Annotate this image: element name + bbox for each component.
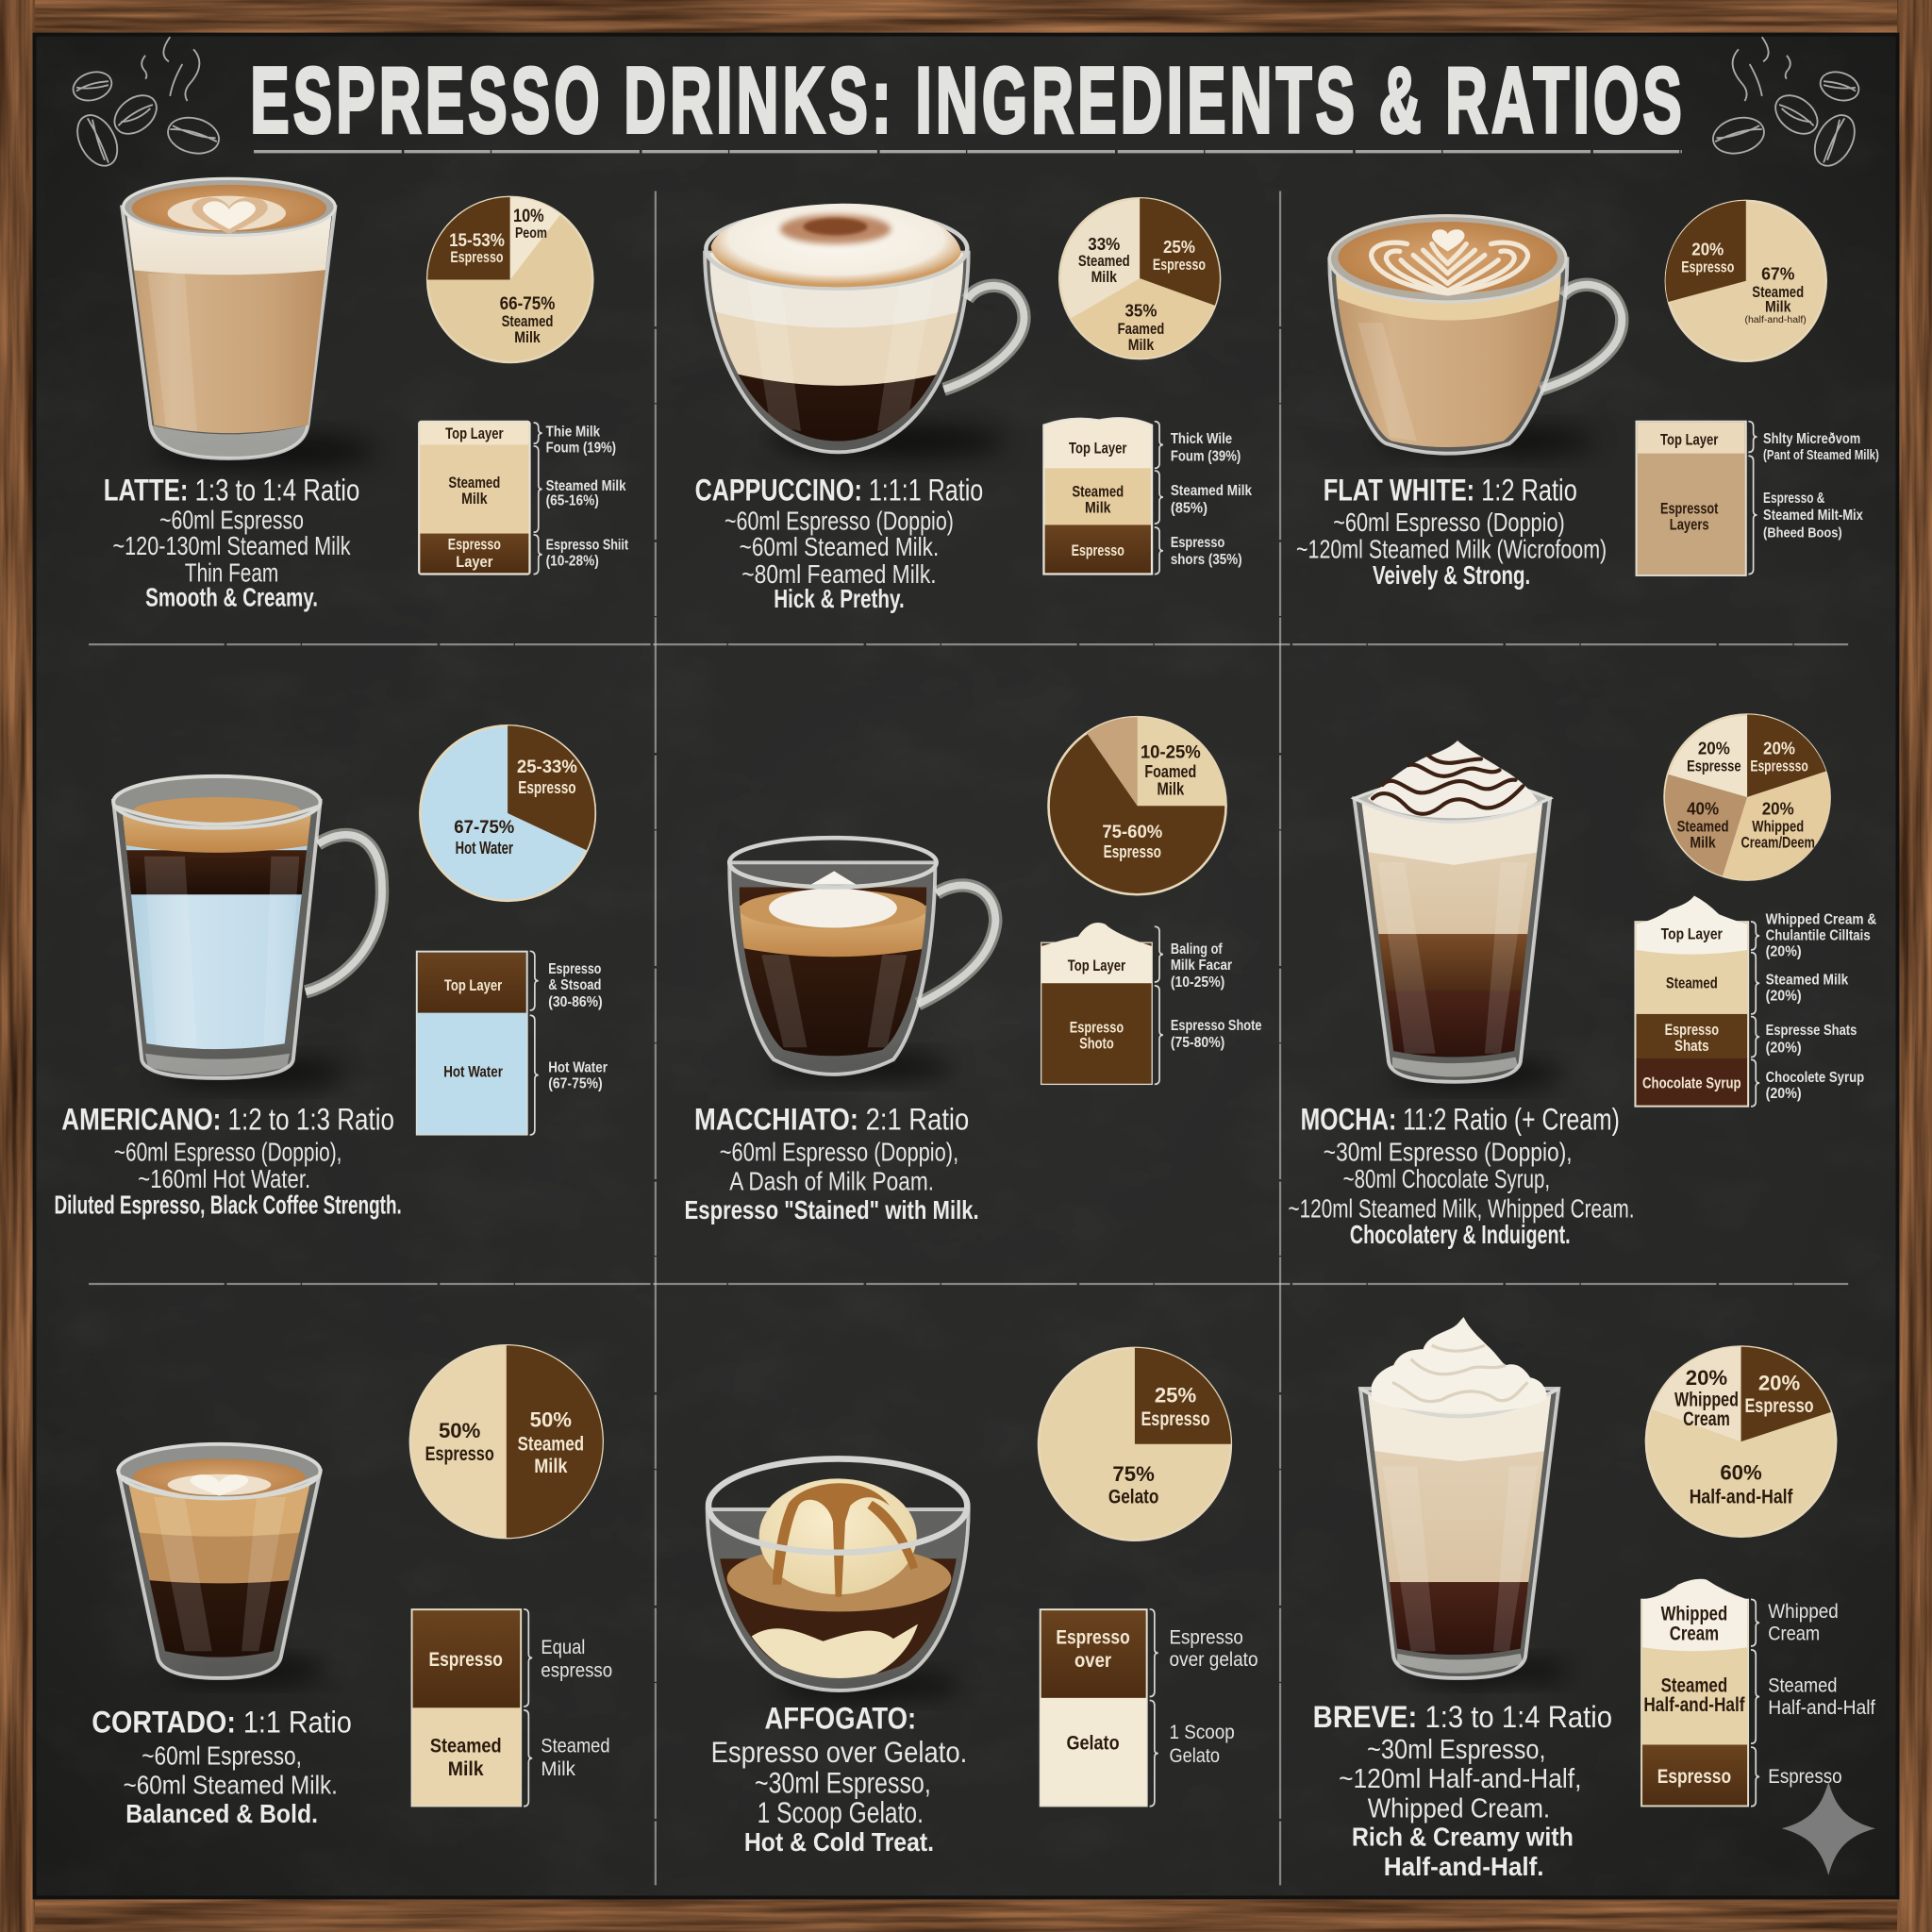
illustration: macchiato cup — [729, 838, 995, 1080]
pie chart: mocha: Espressso — [1750, 758, 1808, 775]
layer diagram: macchiato — [1041, 923, 1262, 1084]
layer diagram: breve: Cream — [1670, 1623, 1719, 1644]
pie chart: breve — [1646, 1347, 1836, 1537]
panel: mocha — [1289, 715, 1876, 1249]
caption: breve: Whipped Cream. — [1368, 1794, 1550, 1824]
pie chart: flat white: 67% — [1761, 263, 1794, 283]
layer diagram: macchiato: Espresso Shote — [1171, 1018, 1262, 1034]
panel: americano — [54, 725, 608, 1220]
pie chart: breve: Whipped — [1674, 1389, 1739, 1410]
layer diagram: americano: Top Layer — [444, 976, 503, 994]
pie chart: americano: 25-33% — [517, 758, 577, 777]
pie chart: mocha: Whipped — [1752, 818, 1804, 836]
caption: mocha: MOCHA: 11:2 Ratio (+ Cream) — [1301, 1102, 1620, 1137]
layer diagram: breve: Steamed — [1661, 1674, 1727, 1696]
pie chart: macchiato: Foamed — [1144, 761, 1196, 781]
layer diagram: mocha: Steamed Milk — [1766, 973, 1848, 989]
pie chart: cappuccino: Milk — [1128, 336, 1155, 354]
layer diagram: flat white — [1637, 422, 1879, 575]
layer diagram: latte: Layer — [456, 553, 493, 571]
pie chart: mocha: Steamed — [1677, 818, 1728, 836]
layer diagram: cappuccino — [1043, 418, 1252, 575]
caption: americano: Diluted Espresso, Black Coffee Strength. — [54, 1191, 402, 1220]
illustration: flat white cup — [1329, 216, 1622, 456]
layer diagram: flat white: Espresso & — [1763, 491, 1824, 507]
pie chart: macchiato: 75-60% — [1102, 823, 1162, 842]
layer diagram: americano: (30-86%) — [548, 994, 603, 1010]
layer diagram: affogato: Espresso — [1056, 1626, 1130, 1648]
layer diagram: flat white: (Bheed Boos) — [1763, 525, 1842, 541]
layer diagram: mocha: Espresse Shats — [1766, 1023, 1857, 1039]
pie chart: cappuccino: 33% — [1088, 234, 1120, 254]
layer diagram: flat white: Shlty Micreðvom — [1763, 431, 1860, 447]
icon: four-point sparkle watermark — [1782, 1782, 1875, 1875]
layer diagram: mocha: Chocolate Syrup — [1642, 1074, 1741, 1091]
pie chart: macchiato: Milk — [1157, 778, 1185, 798]
layer diagram: affogato: over — [1074, 1650, 1111, 1672]
caption: macchiato — [685, 1102, 979, 1224]
layer diagram: breve: Cream — [1768, 1623, 1820, 1644]
illustration: latte glass — [117, 178, 375, 468]
pie chart: cappuccino: Faamed — [1118, 320, 1164, 338]
caption: breve: ~120ml Half-and-Half, — [1339, 1764, 1581, 1794]
panel: cortado — [92, 1345, 612, 1828]
pie chart: americano: Hot Water — [456, 838, 513, 858]
pie chart: breve: 20% — [1686, 1366, 1727, 1390]
layer diagram: breve: Whipped — [1768, 1601, 1839, 1623]
caption: americano: ~160ml Hot Water. — [138, 1164, 310, 1193]
pie chart: latte — [427, 197, 592, 362]
illustration: cortado glass — [118, 1444, 326, 1683]
layer diagram: breve: Espresso — [1768, 1766, 1842, 1788]
caption: mocha: Chocolatery & Induigent. — [1350, 1220, 1571, 1249]
layer diagram: americano: Hot Water — [443, 1063, 503, 1081]
layer diagram: mocha: (20%) — [1766, 1086, 1802, 1102]
caption: mocha: ~120ml Steamed Milk, Whipped Cream. — [1289, 1193, 1635, 1223]
layer diagram: americano: & Stsoad — [548, 977, 601, 993]
layer diagram: mocha: (20%) — [1766, 989, 1802, 1005]
illustration: mocha glass — [1354, 741, 1565, 1088]
layer diagram: latte: Foum (19%) — [546, 440, 616, 456]
caption: flat white: FLAT WHITE: 1:2 Ratio — [1324, 472, 1577, 507]
layer diagram: cappuccino: Steamed — [1072, 482, 1124, 500]
layer diagram: breve: Half-and-Half — [1768, 1697, 1875, 1719]
caption: breve: Half-and-Half. — [1384, 1852, 1544, 1881]
caption: cortado — [92, 1704, 352, 1828]
pie chart: latte: Steamed — [502, 312, 553, 330]
caption: breve: ~30ml Espresso, — [1367, 1735, 1546, 1765]
pie chart: latte: Peom — [515, 225, 547, 242]
layer diagram: cappuccino: Espresso — [1171, 535, 1224, 551]
layer diagram: latte: Top Layer — [445, 425, 504, 442]
caption: latte — [104, 472, 359, 612]
caption: affogato: 1 Scoop Gelato. — [758, 1796, 924, 1829]
layer diagram: macchiato: (10-25%) — [1171, 974, 1224, 991]
layer diagram: cortado: espresso — [541, 1660, 612, 1682]
layer diagram: mocha: Chulantile Cilltais — [1766, 928, 1871, 944]
pie chart: cappuccino: Milk — [1091, 268, 1117, 286]
pie chart: breve: Cream — [1683, 1408, 1730, 1430]
pie chart: flat white: Espresso — [1681, 258, 1734, 276]
illustration: affogato bowl — [708, 1458, 969, 1699]
illustration: americano mug — [111, 776, 382, 1087]
layer diagram: americano: (67-75%) — [548, 1075, 603, 1091]
pie chart: flat white: Steamed — [1752, 283, 1804, 301]
pie chart: latte: 66-75% — [500, 293, 555, 314]
caption: latte: Thin Feam — [185, 558, 278, 587]
layer diagram: mocha: Chocolete Syrup — [1766, 1070, 1864, 1086]
layer diagram: affogato: Espresso — [1170, 1626, 1243, 1648]
layer diagram: affogato: Gelato — [1066, 1733, 1120, 1755]
caption: cappuccino: CAPPUCCINO: 1:1:1 Ratio — [695, 472, 983, 507]
pie chart: mocha: 40% — [1687, 798, 1719, 818]
pie chart: mocha — [1665, 715, 1830, 880]
layer diagram: americano: Hot Water — [548, 1059, 608, 1075]
layer diagram: cortado: Equal — [541, 1637, 585, 1658]
layer diagram: latte: Espresso Shiit — [546, 538, 629, 554]
layer diagram: flat white: Espressot — [1660, 500, 1719, 518]
caption: flat white: ~120ml Steamed Milk (Wicrofoom) — [1296, 535, 1607, 564]
layer diagram: breve: Whipped — [1661, 1604, 1727, 1625]
layer diagram: cappuccino: Steamed Milk — [1171, 483, 1252, 499]
caption: latte: Smooth & Creamy. — [145, 583, 318, 612]
pie chart: cappuccino: Espresso — [1153, 256, 1206, 274]
pie chart: latte: Espresso — [450, 248, 504, 266]
caption: affogato: Espresso over Gelato. — [711, 1736, 967, 1769]
caption: americano — [54, 1102, 402, 1220]
pie chart: americano — [420, 725, 595, 901]
layer diagram: latte: Milk — [461, 490, 488, 508]
layer diagram: cappuccino: Thick Wile — [1171, 431, 1232, 447]
caption: affogato: ~30ml Espresso, — [755, 1766, 931, 1799]
layer diagram: cortado: Espresso — [429, 1649, 503, 1671]
pie chart: affogato: Gelato — [1108, 1486, 1158, 1507]
layer diagram: mocha: Steamed — [1666, 974, 1718, 992]
caption: cappuccino: ~60ml Steamed Milk. — [740, 532, 939, 561]
pie chart: breve: 20% — [1758, 1371, 1801, 1394]
caption: affogato — [711, 1700, 967, 1857]
caption: macchiato: MACCHIATO: 2:1 Ratio — [694, 1102, 969, 1137]
layer diagram: latte — [419, 422, 629, 575]
layer diagram: cappuccino: Top Layer — [1069, 440, 1127, 458]
layer diagram: flat white: Top Layer — [1660, 431, 1719, 449]
layer diagram: macchiato: (75-80%) — [1171, 1035, 1224, 1051]
caption: affogato: AFFOGATO: — [764, 1700, 916, 1735]
caption: mocha: ~30ml Espresso (Doppio), — [1324, 1137, 1573, 1166]
title underline — [254, 150, 1682, 153]
pie chart: breve: Espresso — [1744, 1395, 1814, 1417]
layer diagram: latte: Espresso — [448, 536, 501, 554]
icon: chalk coffee beans left — [70, 37, 223, 173]
layer diagram: mocha — [1635, 896, 1876, 1107]
pie chart: breve: Half-and-Half — [1690, 1486, 1792, 1507]
layer diagram: breve — [1641, 1579, 1875, 1807]
caption: cortado: Balanced & Bold. — [125, 1799, 318, 1828]
layer diagram: latte: Steamed Milk — [546, 478, 626, 494]
caption: cappuccino: ~60ml Espresso (Doppio) — [724, 507, 954, 536]
layer diagram: mocha: Top Layer — [1661, 924, 1723, 942]
pie chart: cortado — [410, 1345, 603, 1538]
pie chart: breve: 60% — [1720, 1461, 1762, 1485]
layer diagram: latte: Steamed — [448, 474, 500, 491]
pie chart: macchiato: 10-25% — [1141, 742, 1201, 762]
pie chart: cappuccino: 35% — [1124, 301, 1157, 321]
caption: cappuccino: ~80ml Feamed Milk. — [741, 559, 937, 589]
pie chart: cappuccino: 25% — [1163, 237, 1195, 257]
pie chart: mocha: 20% — [1762, 798, 1794, 818]
layer diagram: mocha: Whipped Cream & — [1766, 912, 1876, 928]
layer diagram: macchiato: Espresso — [1070, 1019, 1124, 1037]
caption: latte: ~120-130ml Steamed Milk — [113, 531, 351, 560]
layer diagram: cortado: Steamed — [541, 1735, 610, 1757]
caption: flat white — [1296, 472, 1607, 590]
layer diagram: americano — [416, 951, 608, 1135]
panel: breve — [1313, 1317, 1875, 1881]
pie chart: flat white: (half-and-half) — [1744, 315, 1807, 325]
layer diagram: americano: Espresso — [548, 961, 601, 977]
panel: macchiato — [685, 717, 1262, 1224]
layer diagram: cappuccino: shors (35%) — [1171, 552, 1242, 568]
illustration: breve glass — [1360, 1317, 1571, 1683]
caption: latte: LATTE: 1:3 to 1:4 Ratio — [104, 472, 359, 507]
layer diagram: macchiato: Milk Facar — [1171, 958, 1232, 974]
pie chart: cortado: Espresso — [425, 1443, 494, 1465]
caption: cortado: ~60ml Steamed Milk. — [124, 1771, 338, 1800]
layer diagram: cappuccino: Espresso — [1072, 541, 1124, 559]
layer diagram: breve: Espresso — [1657, 1766, 1731, 1788]
layer diagram: affogato: over gelato — [1170, 1649, 1258, 1671]
pie chart: americano: Espresso — [518, 777, 576, 797]
pie chart: flat white: Milk — [1765, 297, 1791, 315]
pie chart: latte: 10% — [513, 206, 544, 226]
layer diagram: cortado — [411, 1609, 612, 1807]
pie chart: mocha: 20% — [1698, 738, 1730, 758]
layer diagram: cappuccino: Foum (39%) — [1171, 448, 1241, 464]
caption: americano: ~60ml Espresso (Doppio), — [114, 1137, 341, 1166]
layer diagram: affogato: 1 Scoop — [1170, 1722, 1235, 1743]
caption: cortado: ~60ml Espresso, — [142, 1740, 302, 1770]
pie chart: mocha: Milk — [1690, 834, 1716, 852]
caption: affogato: Hot & Cold Treat. — [744, 1827, 934, 1857]
pie chart: flat white — [1666, 201, 1826, 361]
layer diagram: macchiato: Shoto — [1079, 1035, 1114, 1053]
caption: macchiato: ~60ml Espresso (Doppio), — [720, 1137, 958, 1166]
caption: breve — [1313, 1699, 1612, 1881]
illustration: cappuccino cup — [702, 204, 1024, 458]
pie chart: cappuccino — [1059, 198, 1220, 358]
layer diagram: cortado: Milk — [541, 1758, 576, 1780]
pie chart: macchiato: Espresso — [1104, 841, 1161, 861]
layer diagram: mocha: Shats — [1674, 1037, 1709, 1055]
caption: flat white: ~60ml Espresso (Doppio) — [1333, 508, 1565, 537]
layer diagram: affogato: Gelato — [1170, 1745, 1220, 1767]
pie chart: cortado: Steamed — [518, 1433, 584, 1455]
pie chart: latte: 15-53% — [449, 230, 505, 251]
pie chart: flat white: 20% — [1691, 239, 1724, 258]
pie chart: mocha: 20% — [1763, 738, 1795, 758]
caption: macchiato: A Dash of Milk Poam. — [729, 1167, 934, 1196]
layer diagram: breve: Steamed — [1768, 1674, 1837, 1696]
layer diagram: flat white: Steamed Milt-Mix — [1763, 508, 1863, 524]
caption: flat white: Veively & Strong. — [1373, 560, 1530, 590]
pie chart: affogato: 25% — [1155, 1383, 1197, 1407]
pie chart: cappuccino: Steamed — [1078, 252, 1130, 270]
layer diagram: mocha: (20%) — [1766, 1040, 1802, 1056]
layer diagram: latte: (65-16%) — [546, 493, 599, 509]
pie chart: affogato: Espresso — [1141, 1408, 1210, 1430]
layer diagram: macchiato: Top Layer — [1068, 957, 1125, 974]
pie chart: mocha: Espresse — [1687, 758, 1741, 775]
caption: latte: ~60ml Espresso — [159, 505, 304, 534]
layer diagram: cappuccino: (85%) — [1171, 500, 1208, 516]
pie chart: mocha: Cream/Deem — [1741, 834, 1815, 852]
caption: mocha — [1289, 1102, 1635, 1249]
layer diagram: flat white: (Pant of Steamed Milk) — [1763, 448, 1879, 463]
caption: americano: AMERICANO: 1:2 to 1:3 Ratio — [61, 1102, 394, 1137]
pie chart: americano: 67-75% — [454, 818, 514, 838]
caption: cappuccino: Hick & Prethy. — [774, 584, 905, 613]
layer diagram: cortado: Milk — [448, 1758, 484, 1780]
panel: latte — [104, 178, 629, 612]
caption: cortado: CORTADO: 1:1 Ratio — [92, 1704, 352, 1739]
pie chart: cortado: Milk — [534, 1456, 568, 1477]
caption: breve: Rich & Creamy with — [1352, 1823, 1574, 1852]
caption: breve: BREVE: 1:3 to 1:4 Ratio — [1313, 1699, 1612, 1734]
layer diagram: affogato — [1040, 1609, 1258, 1807]
title: ESPRESSO DRINKS: INGREDIENTS & RATIOS — [250, 49, 1682, 152]
caption: mocha: ~80ml Chocolate Syrup, — [1343, 1164, 1550, 1193]
panel: affogato — [708, 1348, 1258, 1857]
pie chart: affogato: 75% — [1112, 1462, 1155, 1486]
layer diagram: cappuccino: Milk — [1085, 498, 1111, 516]
panel: cappuccino — [695, 198, 1252, 613]
panel: flat white — [1296, 201, 1879, 590]
pie chart: cortado: 50% — [530, 1407, 572, 1431]
pie chart: macchiato — [1049, 717, 1226, 894]
pie chart: cortado: 50% — [439, 1419, 481, 1442]
caption: macchiato: Espresso "Stained" with Milk. — [685, 1195, 979, 1224]
layer diagram: latte: (10-28%) — [546, 554, 599, 570]
layer diagram: mocha: (20%) — [1766, 944, 1802, 960]
layer diagram: flat white: Layers — [1670, 516, 1709, 534]
layer diagram: macchiato: Baling of — [1171, 941, 1223, 958]
layer diagram: breve: Half-and-Half — [1643, 1694, 1745, 1716]
layer diagram: mocha: Espresso — [1665, 1021, 1719, 1039]
layer diagram: latte: Thie Milk — [546, 424, 600, 440]
icon: chalk coffee beans right — [1709, 37, 1862, 173]
layer diagram: cortado: Steamed — [430, 1735, 502, 1757]
pie chart: affogato — [1039, 1348, 1231, 1541]
pie chart: latte: Milk — [514, 328, 541, 346]
caption: cappuccino — [695, 472, 983, 613]
